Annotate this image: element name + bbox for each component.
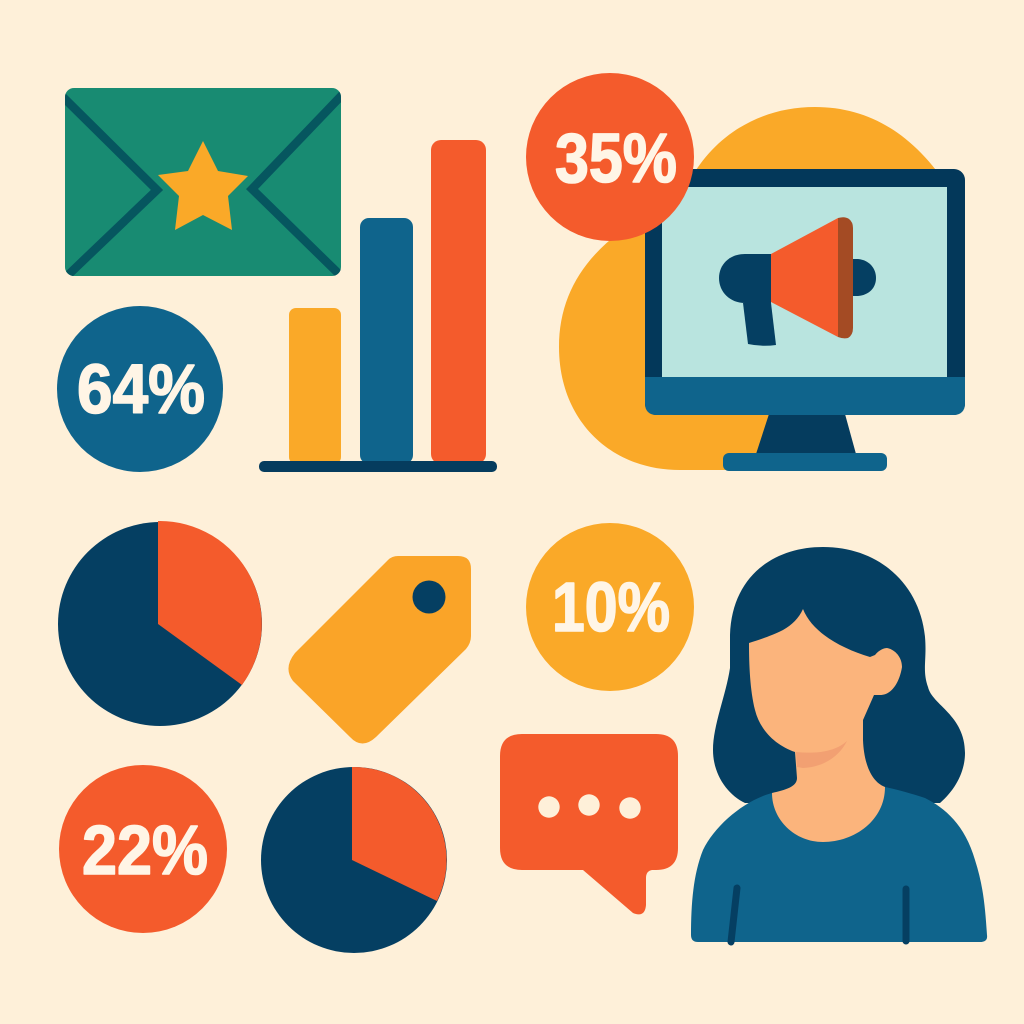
badge: 10% <box>526 523 694 691</box>
monitor with megaphone on yellow blob <box>559 107 965 471</box>
chin shadow <box>796 741 847 768</box>
icon: envelope with star <box>62 88 344 277</box>
icon: price tag <box>288 556 471 744</box>
badge: 35%: 35% <box>555 119 677 197</box>
face and neck <box>749 609 902 842</box>
monitor <box>645 169 965 471</box>
badge: 22% <box>59 765 227 933</box>
badge: 10%: 10% <box>552 568 670 646</box>
body <box>691 787 987 942</box>
illustration: woman <box>691 547 987 942</box>
pie chart small <box>261 767 447 953</box>
yellow blob <box>559 107 950 470</box>
sleeve lines <box>731 888 906 942</box>
badge: 64% <box>57 306 223 472</box>
badge: 22%: 22% <box>82 811 208 889</box>
megaphone <box>719 217 876 346</box>
badge: 64%: 64% <box>77 350 205 428</box>
badge: 35% <box>526 73 694 241</box>
bar chart <box>259 140 497 472</box>
hair <box>713 547 965 803</box>
icon: speech bubble <box>500 734 678 914</box>
pie chart large <box>58 521 262 726</box>
